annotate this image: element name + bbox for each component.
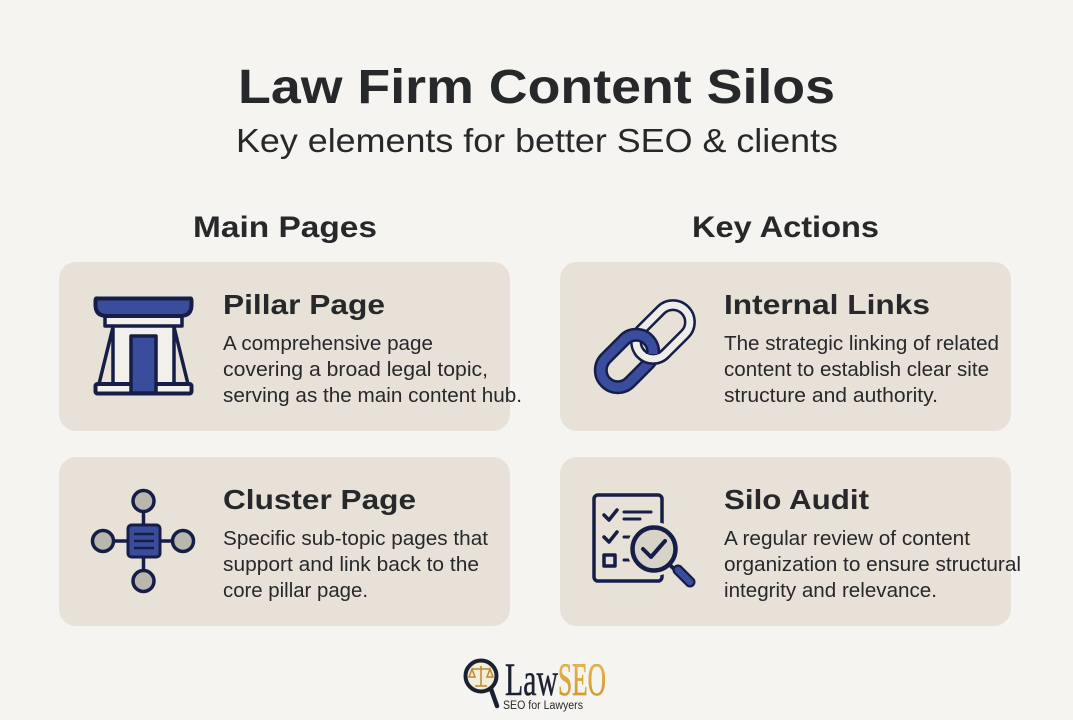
card text: internal links: structure and authority. bbox=[724, 385, 938, 407]
icon: chain links bbox=[594, 298, 697, 394]
icon: checklist with magnifier bbox=[594, 495, 690, 582]
logo tagline: SEO for Lawyers bbox=[503, 700, 583, 712]
logo wordmark: Law bbox=[505, 654, 558, 706]
card title: cluster page: Cluster Page bbox=[223, 484, 416, 515]
heading: key actions: Key Actions bbox=[692, 211, 879, 244]
card text: internal links: The strategic linking of related bbox=[724, 333, 999, 355]
icon: pillar bbox=[96, 298, 192, 394]
panel: pillar page bbox=[59, 262, 522, 431]
card title: pillar page: Pillar Page bbox=[223, 289, 385, 320]
card text: internal links bbox=[724, 333, 999, 407]
subtitle: Key elements for better SEO & clients bbox=[236, 122, 838, 159]
card text: cluster page bbox=[223, 528, 488, 602]
icon: cluster hub bbox=[92, 490, 194, 592]
panel: cluster page bbox=[59, 457, 510, 626]
icon: magnifier with scales bbox=[466, 660, 497, 706]
card text: silo audit: A regular review of content bbox=[724, 528, 970, 550]
card text: cluster page: core pillar page. bbox=[223, 580, 368, 602]
card title: internal links: Internal Links bbox=[724, 289, 930, 320]
card text: silo audit bbox=[724, 528, 1021, 602]
panel: internal links bbox=[560, 262, 1011, 431]
card text: pillar page bbox=[223, 333, 522, 407]
logo: LawSEO: SEO bbox=[558, 654, 606, 706]
title: Law Firm Content Silos bbox=[238, 61, 835, 114]
heading: main pages: Main Pages bbox=[193, 211, 377, 244]
card text: pillar page: covering a broad legal topic, bbox=[223, 359, 488, 381]
logo: LawSEO bbox=[466, 654, 606, 712]
card text: cluster page: Specific sub-topic pages that bbox=[223, 528, 488, 550]
card text: silo audit: organization to ensure structural bbox=[724, 554, 1021, 576]
card text: internal links: content to establish clear site bbox=[724, 359, 989, 381]
panel: silo audit bbox=[560, 457, 1021, 626]
card text: silo audit: integrity and relevance. bbox=[724, 580, 937, 602]
card text: pillar page: serving as the main content hub. bbox=[223, 385, 522, 407]
card title: silo audit: Silo Audit bbox=[724, 484, 869, 515]
card text: cluster page: support and link back to the bbox=[223, 554, 479, 576]
card text: pillar page: A comprehensive page bbox=[223, 333, 433, 355]
